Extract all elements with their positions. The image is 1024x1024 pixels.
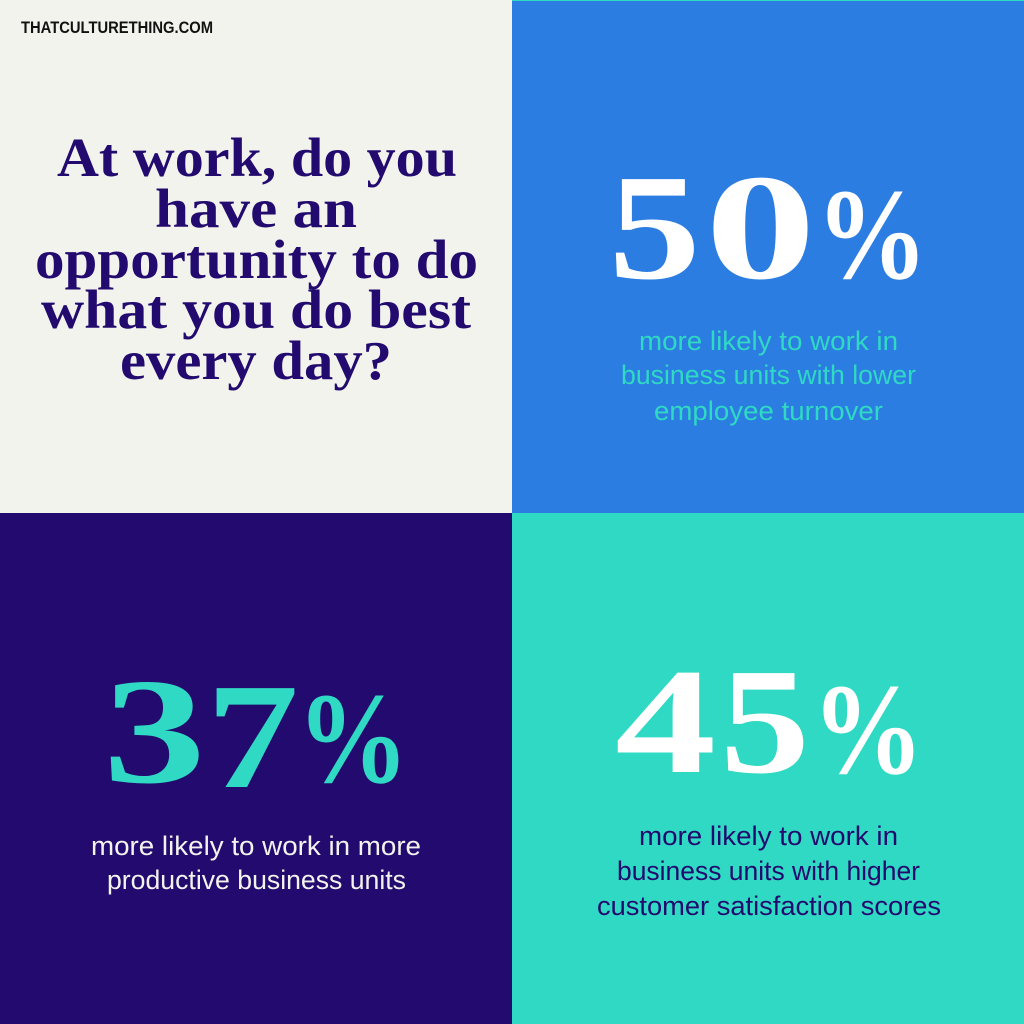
description: satisfaction: more likely to work in xyxy=(639,821,898,851)
heading: what you do best xyxy=(41,279,472,340)
number: 45%: 5 xyxy=(720,637,810,805)
panel: question xyxy=(0,0,512,513)
number: 45%: 4 xyxy=(615,638,716,805)
description: turnover: business units with lower xyxy=(621,360,916,390)
panel: 45 percent stat xyxy=(512,513,1024,1024)
heading: At work, do you xyxy=(57,127,457,188)
number: 50%: 5 xyxy=(608,144,701,311)
number: 50% xyxy=(608,144,928,311)
heading: opportunity to do xyxy=(35,229,478,290)
description: productivity xyxy=(91,831,421,895)
number: 37% xyxy=(103,647,409,820)
description: satisfaction: business units with higher xyxy=(617,856,920,886)
description: turnover xyxy=(621,326,916,426)
panel: 50 percent stat xyxy=(512,0,1024,513)
number: 37%: 7 xyxy=(206,652,299,820)
description: productivity: more likely to work in more xyxy=(91,831,421,861)
number: 45% xyxy=(615,637,924,805)
description: productivity: productive business units xyxy=(107,865,406,895)
number: 50%: 0 xyxy=(705,144,816,311)
description: turnover: employee turnover xyxy=(654,396,883,426)
description: satisfaction xyxy=(597,821,941,921)
panel: 37 percent stat xyxy=(0,513,512,1024)
number: 37%: 3 xyxy=(103,647,206,815)
number: 37%: % xyxy=(297,667,409,811)
heading xyxy=(35,127,478,391)
description: turnover: more likely to work in xyxy=(639,326,898,356)
brand label: THATCULTURETHING.COM xyxy=(21,18,213,37)
description: satisfaction: customer satisfaction scores xyxy=(597,891,941,921)
number: 50%: % xyxy=(816,163,928,307)
number: 45%: % xyxy=(812,658,924,802)
heading: every day? xyxy=(120,330,392,391)
heading: have an xyxy=(155,178,357,239)
